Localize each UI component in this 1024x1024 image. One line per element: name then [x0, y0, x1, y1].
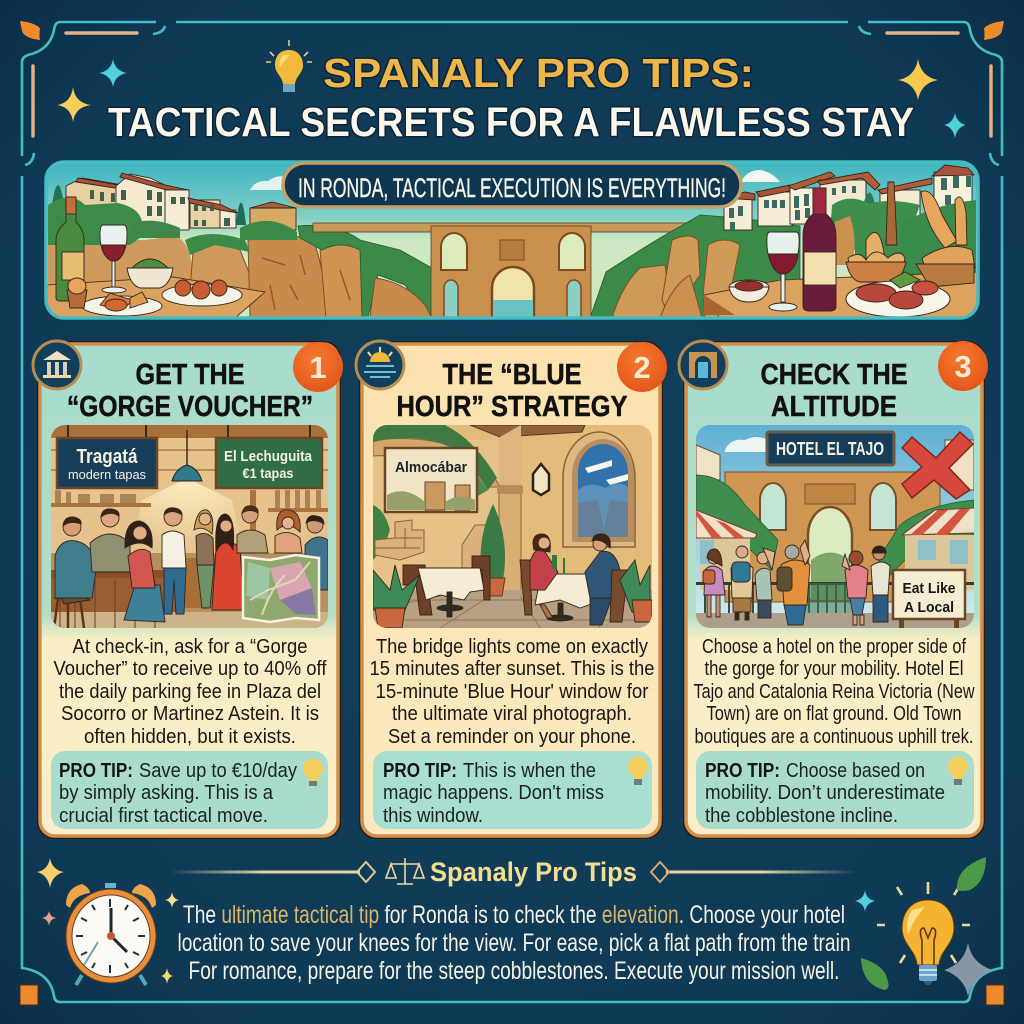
callout pill — [283, 163, 741, 207]
sign: Almocabar: Almocábar — [395, 459, 467, 476]
heading — [67, 359, 313, 423]
pro tip box: this window. — [383, 805, 483, 827]
panel: card 1 — [33, 341, 343, 838]
body text — [694, 636, 975, 748]
pro tip box: PRO TIP: — [383, 760, 457, 782]
icon: scales — [386, 858, 424, 884]
left table and food — [46, 277, 265, 318]
tourists — [703, 540, 890, 625]
icon: bridge — [679, 341, 727, 389]
plants — [373, 565, 420, 610]
heading: GET THE — [136, 359, 244, 391]
lantern — [533, 464, 549, 495]
people — [55, 506, 328, 622]
shops — [700, 535, 750, 590]
cypress and pot — [480, 504, 505, 580]
vines — [373, 425, 497, 490]
footer heading: Spanaly Pro Tips — [430, 857, 637, 887]
left buildings — [66, 173, 296, 230]
badge 1 — [293, 342, 343, 392]
illustration: bridge viewpoint — [696, 425, 975, 628]
stone arch — [373, 439, 500, 487]
pro tip box: the cobblestone incline. — [705, 805, 898, 827]
badge 3: 3 — [954, 349, 972, 384]
sign: El Lechuguita — [216, 438, 322, 488]
brick wall — [375, 520, 424, 560]
body text: the daily parking fee in Plaza del — [59, 681, 321, 703]
pro tip box: Save up to €10/day — [139, 760, 297, 782]
icon: bank building — [33, 341, 81, 389]
body text: Voucher” to receive up to 40% off — [54, 658, 327, 680]
badge 3 — [938, 341, 988, 391]
sign: Eat Like A Local: A Local — [904, 599, 954, 616]
sign: Tragata: Tragatá — [76, 446, 138, 468]
pro tip box: PRO TIP: — [59, 760, 133, 782]
right table and food — [704, 272, 978, 318]
icon: title light bulb — [266, 40, 312, 92]
pro tip box: PRO TIP: — [705, 760, 780, 782]
red cross — [902, 432, 973, 499]
icon: sunset — [356, 341, 404, 389]
panel: hero banner — [46, 162, 978, 318]
illustration: restaurant terrace — [373, 425, 652, 628]
title: SPANALY PRO TIPS: — [323, 50, 754, 96]
pro tip box — [373, 751, 652, 829]
pro tip box: magic happens. Don't miss — [383, 782, 604, 804]
body text: Set a reminder on your phone. — [388, 726, 636, 748]
footer text: The ultimate tactical tip for Ronda is to check the elevation. Choose your hotel — [183, 901, 845, 929]
greens — [696, 475, 778, 570]
bridge — [313, 223, 692, 232]
sign: El Lechuguita: El Lechuguita — [224, 448, 313, 465]
sign: Hotel El Tajo — [767, 432, 894, 465]
icon: footer light bulb — [877, 882, 970, 985]
body text — [370, 636, 654, 748]
sign: Hotel El Tajo: HOTEL EL TAJO — [776, 439, 884, 459]
body text: Choose a hotel on the proper side of — [702, 636, 966, 658]
body text: often hidden, but it exists. — [84, 726, 296, 748]
window — [563, 432, 635, 547]
body text: the ultimate viral photograph. — [392, 703, 632, 725]
body text: At check-in, ask for a “Gorge — [72, 636, 308, 658]
pro tip box: by simply asking. This is a — [59, 782, 274, 804]
heading: HOUR” STRATEGY — [396, 391, 628, 423]
panel: card 3 — [679, 341, 988, 838]
right table — [520, 560, 532, 615]
panel: card 2 — [356, 341, 667, 838]
sparkles: header — [57, 59, 966, 138]
railing — [696, 582, 974, 585]
map — [243, 555, 319, 622]
icon: alarm clock — [66, 883, 156, 985]
body text: The bridge lights come on exactly — [376, 636, 648, 658]
pro tip box: mobility. Don’t underestimate — [705, 782, 945, 804]
sign: Tragata — [57, 425, 310, 488]
heading — [396, 359, 628, 423]
heading: CHECK THE — [760, 359, 908, 391]
icon: bulb — [303, 759, 323, 786]
sparkles: footer — [37, 858, 875, 984]
footer heading — [170, 857, 856, 887]
sign: Tragata: modern tapas — [68, 467, 146, 482]
left table — [373, 534, 652, 628]
stool — [54, 598, 86, 628]
pro tip box: Choose based on — [786, 760, 925, 782]
sign: Eat Like A Local — [893, 570, 965, 628]
heading — [760, 359, 908, 423]
callout pill: IN RONDA, TACTICAL EXECUTION IS EVERYTHING! — [298, 173, 726, 203]
pro tip box — [51, 751, 328, 829]
body text — [54, 636, 327, 748]
right cliffs & greens — [590, 215, 800, 318]
body text: 15 minutes after sunset. This is the — [370, 658, 654, 680]
title — [108, 50, 914, 145]
badge 1: 1 — [309, 350, 327, 385]
body text: Town) are on flat ground. Old Town — [706, 703, 962, 725]
badge 2 — [617, 342, 667, 392]
illustration: tapas bar — [51, 425, 328, 628]
floor — [373, 590, 652, 628]
heading: THE “BLUE — [442, 359, 582, 391]
sign: Eat Like A Local: Eat Like — [902, 580, 956, 597]
left greens — [48, 198, 142, 245]
body text: boutiques are a continuous uphill trek. — [694, 726, 974, 748]
pro tip box: This is when the — [463, 760, 596, 782]
footer text — [178, 901, 850, 985]
sign: El Lechuguita: €1 tapas — [242, 465, 294, 481]
body text: 15-minute 'Blue Hour' window for — [376, 681, 649, 703]
left cliffs — [48, 236, 196, 285]
body text: Socorro or Martinez Astein. It is — [61, 703, 319, 725]
pro tip box: crucial first tactical move. — [59, 805, 268, 827]
title: TACTICAL SECRETS FOR A FLAWLESS STAY — [108, 99, 914, 145]
icon: leaves — [861, 857, 986, 990]
pro tip box — [696, 751, 974, 829]
icon: bulb — [628, 757, 648, 785]
icon: bulb — [948, 757, 968, 785]
heading: “GORGE VOUCHER” — [67, 391, 313, 423]
woman — [530, 550, 558, 590]
body text: the gorge for your mobility. Hotel El — [704, 658, 964, 680]
heading: ALTITUDE — [771, 391, 897, 423]
pendant lamp — [172, 465, 202, 481]
bridge — [725, 472, 940, 602]
grey sparkle — [944, 943, 993, 996]
man — [585, 551, 620, 598]
clouds — [250, 176, 283, 190]
sign: Almocabar — [385, 448, 477, 512]
badge 2: 2 — [633, 350, 651, 385]
right buildings — [722, 165, 974, 230]
footer text: For romance, prepare for the steep cobblestones. Execute your mission well. — [188, 957, 840, 985]
buildings — [696, 445, 720, 480]
